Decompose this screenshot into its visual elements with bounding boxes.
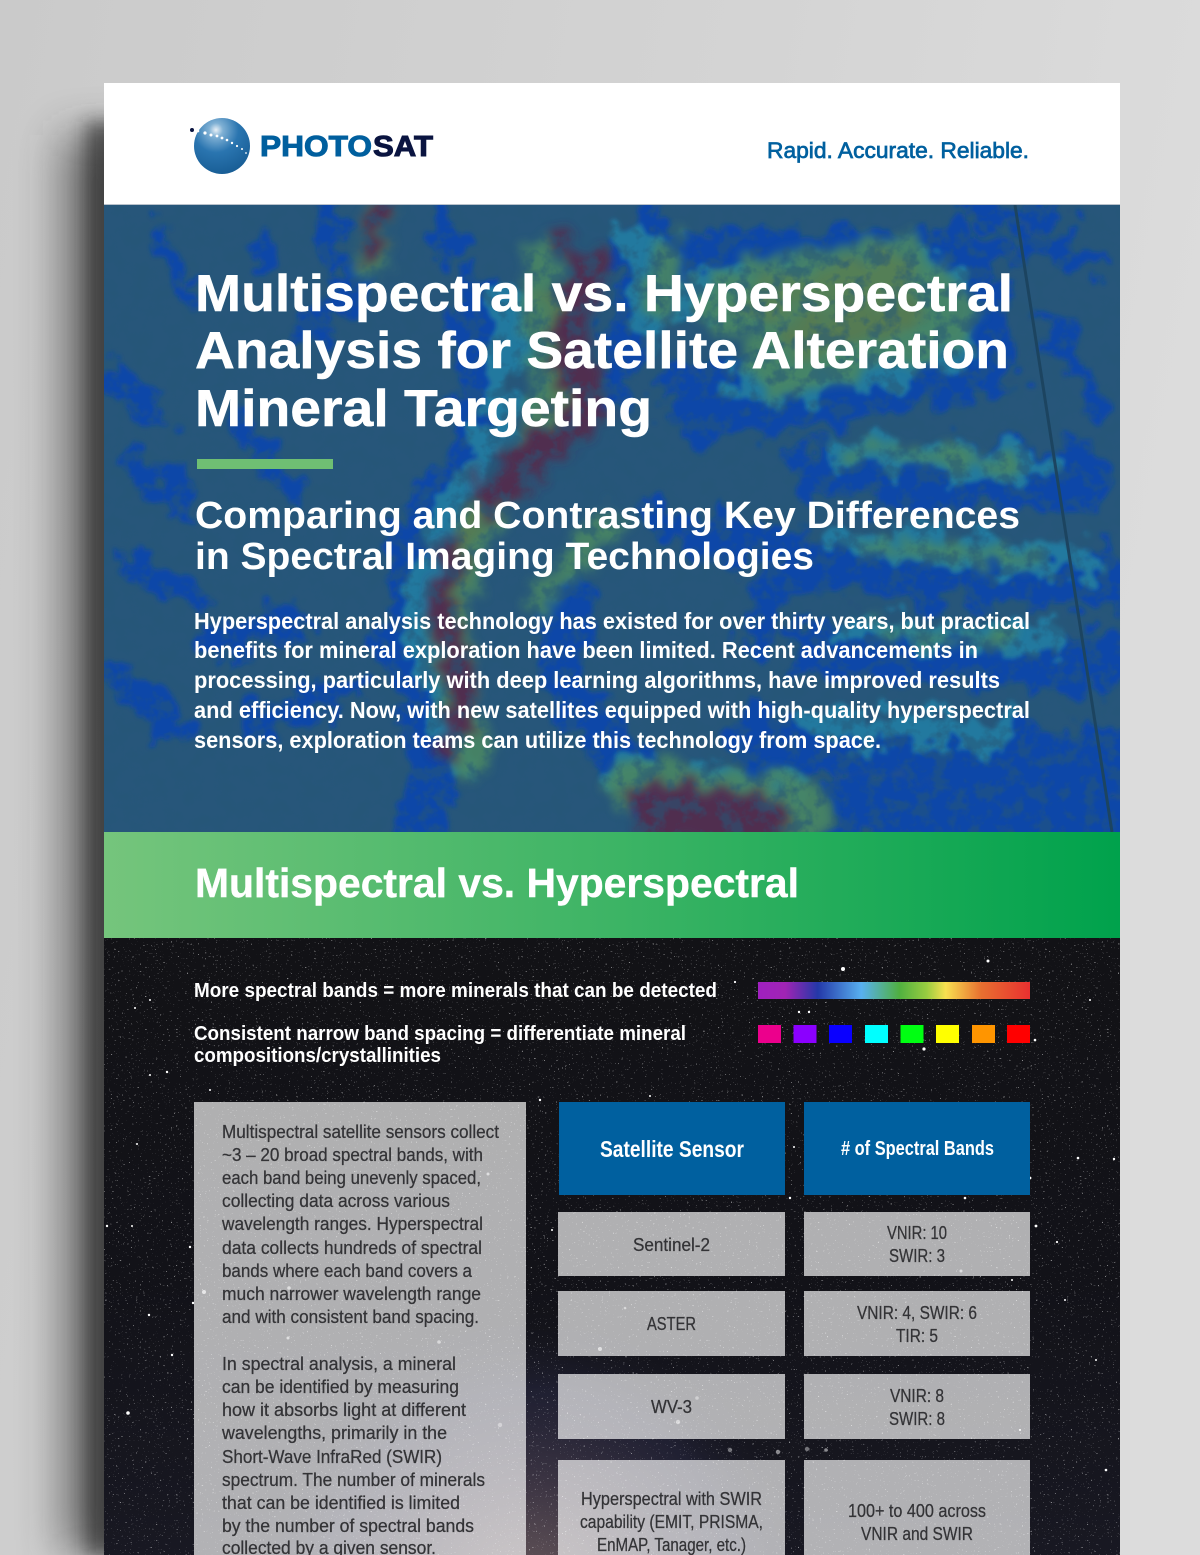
row: Sentinel-2: Sentinel-2: [633, 1235, 710, 1255]
panel: explanation text: by the number of spectral bands: [222, 1516, 474, 1536]
panel: explanation text: and with consistent band spacing.: [222, 1307, 479, 1327]
panel: explanation text: bands where each band covers a: [222, 1261, 473, 1281]
row: Hyperspectral with SWIR: VNIR and SWIR: [861, 1524, 973, 1544]
hero intro paragraph: benefits for mineral exploration have been limited. Recent advancements in: [194, 637, 978, 663]
poster tight drop shadow: [86, 122, 136, 1555]
panel: explanation text: collecting data across various: [222, 1191, 450, 1211]
panel: explanation text: wavelength ranges. Hyperspectral: [221, 1214, 483, 1234]
hero subtitle: in Spectral Imaging Technologies: [195, 536, 814, 578]
hero intro paragraph: Hyperspectral analysis technology has existed for over thirty years, but practical: [194, 608, 1030, 634]
row: ASTER: TIR: 5: [896, 1326, 938, 1346]
row: WV-3: [558, 1374, 1030, 1439]
table header: Satellite Sensor: [559, 1102, 785, 1195]
panel: explanation text: data collects hundreds of spectral: [222, 1238, 482, 1258]
table header: # of Spectral Bands: [804, 1102, 1030, 1195]
accent bar: [197, 459, 333, 469]
hero intro paragraph: and efficiency. Now, with new satellites equipped with high-quality hyperspectral: [194, 697, 1030, 723]
hero title: Analysis for Satellite Alteration: [195, 322, 1009, 380]
panel: explanation text: spectrum. The number of minerals: [222, 1470, 485, 1490]
discrete band squares: [758, 1025, 1030, 1043]
panel: explanation text: wavelengths, primarily in the: [221, 1423, 447, 1443]
panel: explanation text: that can be identified is limited: [222, 1493, 460, 1513]
header bar: [104, 83, 1120, 205]
table header: Satellite Sensor: Satellite Sensor: [600, 1136, 744, 1162]
hero satellite alteration map background: [104, 205, 1120, 832]
table header: # of Spectral Bands: # of Spectral Bands: [841, 1138, 994, 1160]
legend: narrow band spacing: compositions/crystallinities: [194, 1045, 441, 1067]
row: Hyperspectral with SWIR: capability (EMIT, PRISMA,: [580, 1512, 763, 1532]
row: Sentinel-2: [558, 1212, 1030, 1276]
hero title: [195, 265, 1013, 438]
row: ASTER: [558, 1291, 1030, 1356]
row: WV-3: WV-3: [651, 1397, 692, 1417]
starry night section background: [104, 938, 1120, 1555]
legend: more spectral bands: [194, 980, 1030, 1002]
logo: Photosat: PHOTO: [260, 131, 372, 163]
row: ASTER: ASTER: [647, 1314, 696, 1334]
logo: Photosat: [190, 118, 433, 174]
panel: explanation text: each band being unevenly spaced,: [222, 1168, 481, 1188]
hero subtitle: Comparing and Contrasting Key Differences: [195, 495, 1020, 537]
panel: explanation text: how it absorbs light at different: [222, 1400, 466, 1420]
row: Hyperspectral with SWIR: [558, 1460, 1030, 1555]
panel: explanation text: ~3 – 20 broad spectral bands, with: [222, 1145, 483, 1165]
poster soft drop shadow: [62, 135, 142, 1555]
hero intro paragraph: [194, 608, 1030, 753]
row: WV-3: SWIR: 8: [889, 1409, 945, 1429]
panel: explanation text: [194, 1102, 526, 1555]
row: Sentinel-2: VNIR: 10: [887, 1223, 947, 1243]
row: Hyperspectral with SWIR: Hyperspectral with SWIR: [581, 1489, 762, 1509]
logo: Photosat: SAT: [373, 131, 433, 163]
rainbow gradient bar: [758, 982, 1030, 999]
row: Hyperspectral with SWIR: 100+ to 400 across: [848, 1501, 986, 1521]
green section band: Multispectral vs. Hyperspectral: [195, 860, 799, 906]
green section band: [104, 832, 1120, 938]
tagline: Rapid. Accurate. Reliable.: [767, 138, 1029, 163]
row: WV-3: VNIR: 8: [890, 1386, 944, 1406]
hero intro paragraph: sensors, exploration teams can utilize this technology from space.: [194, 727, 881, 753]
panel: explanation text: Multispectral satellite sensors collect: [222, 1122, 499, 1142]
hero intro paragraph: processing, particularly with deep learning algorithms, have improved results: [194, 667, 1000, 693]
row: Hyperspectral with SWIR: EnMAP, Tanager, etc.): [597, 1535, 746, 1555]
panel: explanation text: Short-Wave InfraRed (SWIR): [222, 1447, 442, 1467]
row: ASTER: VNIR: 4, SWIR: 6: [857, 1303, 977, 1323]
hero title: Multispectral vs. Hyperspectral: [195, 265, 1013, 323]
panel: explanation text: In spectral analysis, a mineral: [222, 1354, 456, 1374]
legend: narrow band spacing: [194, 1023, 1030, 1067]
hero title: Mineral Targeting: [195, 380, 652, 438]
hero subtitle: [195, 495, 1020, 578]
legend: narrow band spacing: Consistent narrow band spacing = differentiate mineral: [194, 1023, 686, 1045]
panel: explanation text: much narrower wavelength range: [222, 1284, 481, 1304]
panel: explanation text: can be identified by measuring: [222, 1377, 459, 1397]
legend: more spectral bands: More spectral bands = more minerals that can be detected: [194, 980, 717, 1002]
row: Sentinel-2: SWIR: 3: [889, 1246, 945, 1266]
